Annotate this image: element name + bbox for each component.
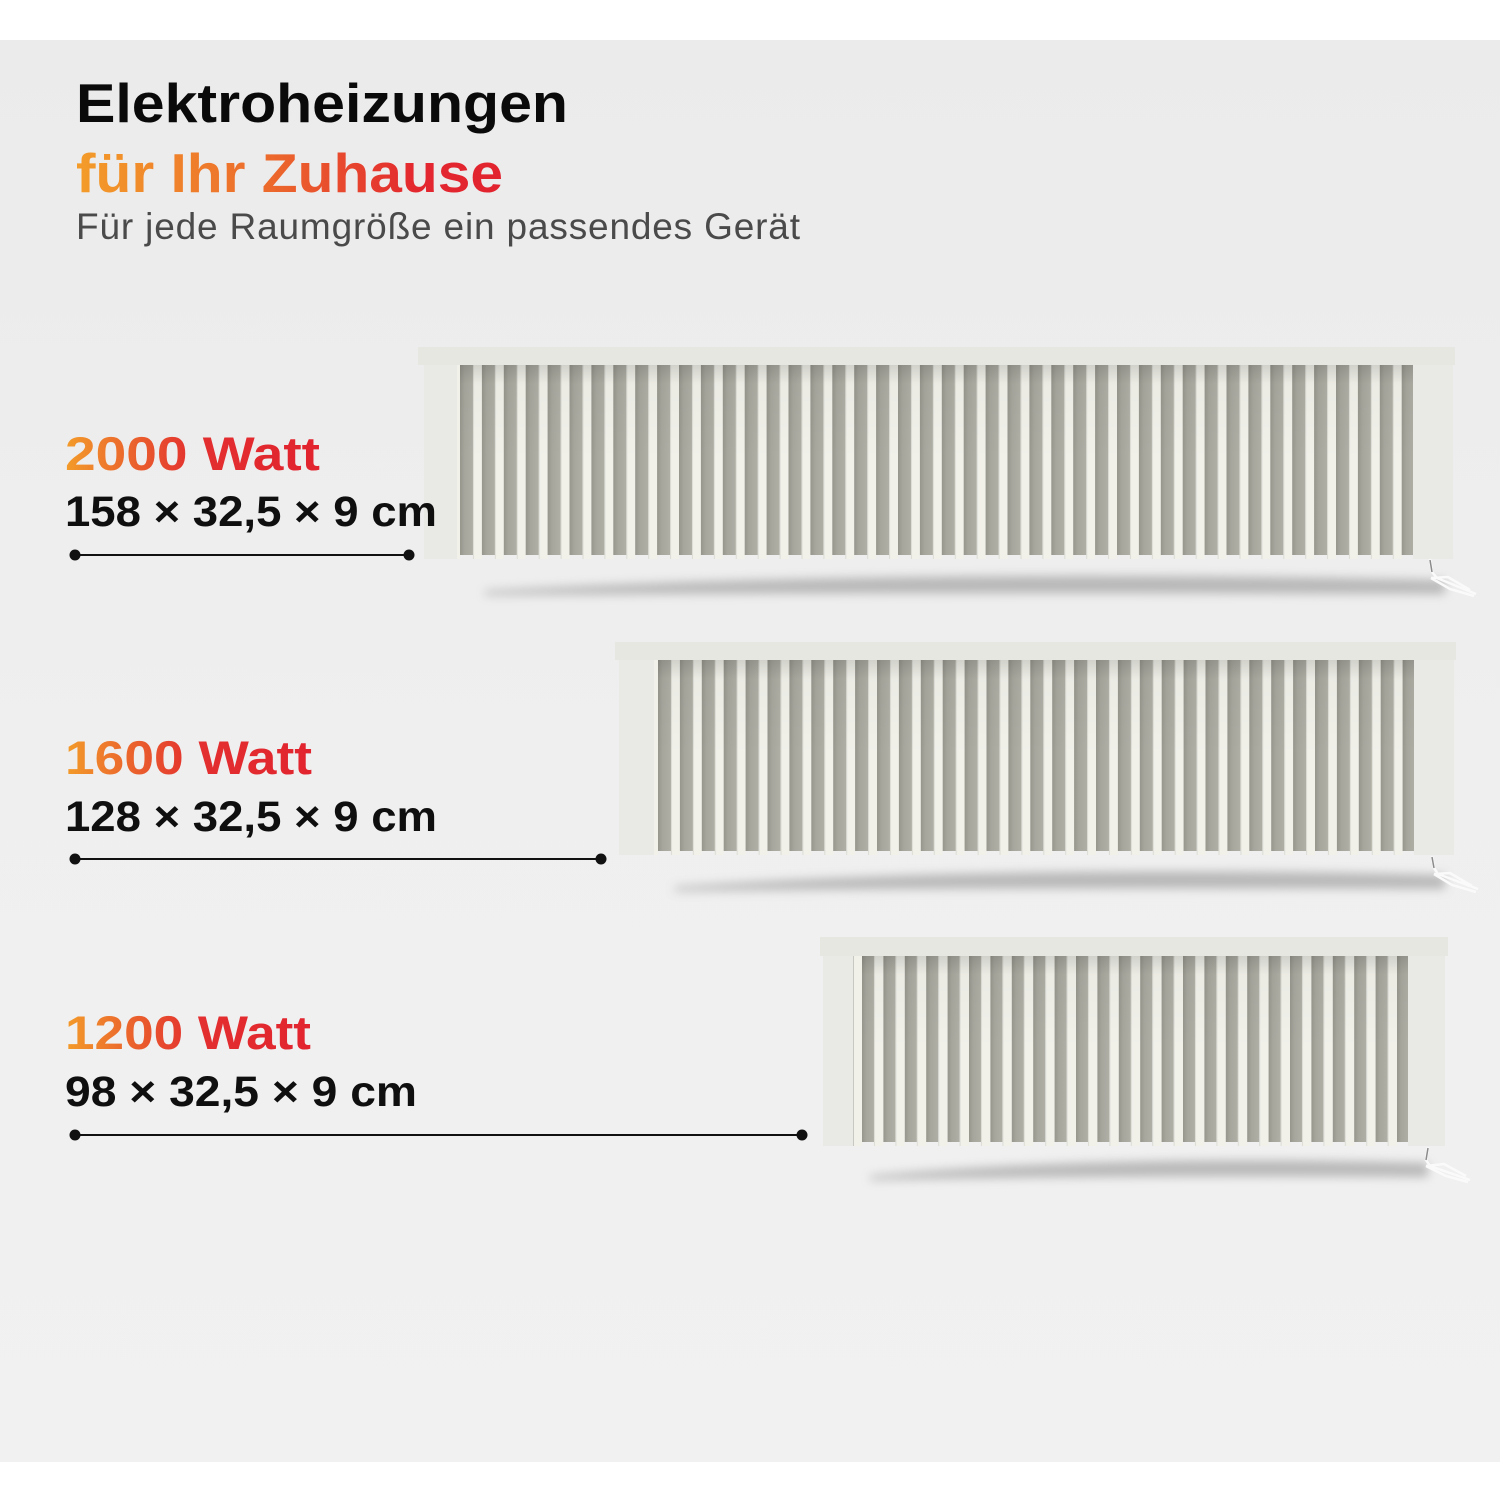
width line: [70, 1130, 808, 1140]
label: 1600 Watt: [65, 731, 606, 864]
top cap: [615, 642, 1456, 660]
top cap: [418, 347, 1455, 365]
width line: [70, 854, 606, 864]
radiator: 1200 Watt: [820, 937, 1470, 1182]
shadow: [675, 871, 1445, 891]
wattage: 1600 Watt: [65, 731, 312, 784]
dimensions: 128 × 32,5 × 9 cm: [65, 793, 437, 841]
subtitle: Für jede Raumgröße ein passendes Gerät: [76, 206, 801, 247]
wattage: 2000 Watt: [65, 427, 320, 480]
foot and cable: [1430, 559, 1476, 596]
heading: für Ihr Zuhause: für Ihr Zuhause: [76, 142, 503, 204]
title: [76, 72, 801, 247]
shadow: [485, 576, 1445, 595]
radiator: 1600 Watt: [615, 642, 1478, 892]
top cap: [820, 937, 1448, 956]
fins: [862, 956, 1408, 1146]
dimensions: 158 × 32,5 × 9 cm: [65, 488, 437, 536]
fins: [460, 365, 1413, 559]
shadow: [870, 1160, 1428, 1180]
heading: Elektroheizungen: Elektroheizungen: [76, 72, 568, 134]
wattage: 1200 Watt: [65, 1006, 311, 1059]
width line: [70, 550, 414, 560]
dimensions: 98 × 32,5 × 9 cm: [65, 1068, 417, 1116]
end panels: [619, 660, 1454, 855]
radiator: 2000 Watt: [418, 347, 1476, 596]
label: 2000 Watt: [65, 427, 437, 560]
label: 1200 Watt: [65, 1006, 808, 1140]
end panels: [424, 365, 1453, 559]
foot and cable: [1432, 856, 1478, 892]
end panels: [823, 956, 1445, 1146]
foot and cable: [1426, 1147, 1470, 1182]
fins: [658, 660, 1414, 855]
